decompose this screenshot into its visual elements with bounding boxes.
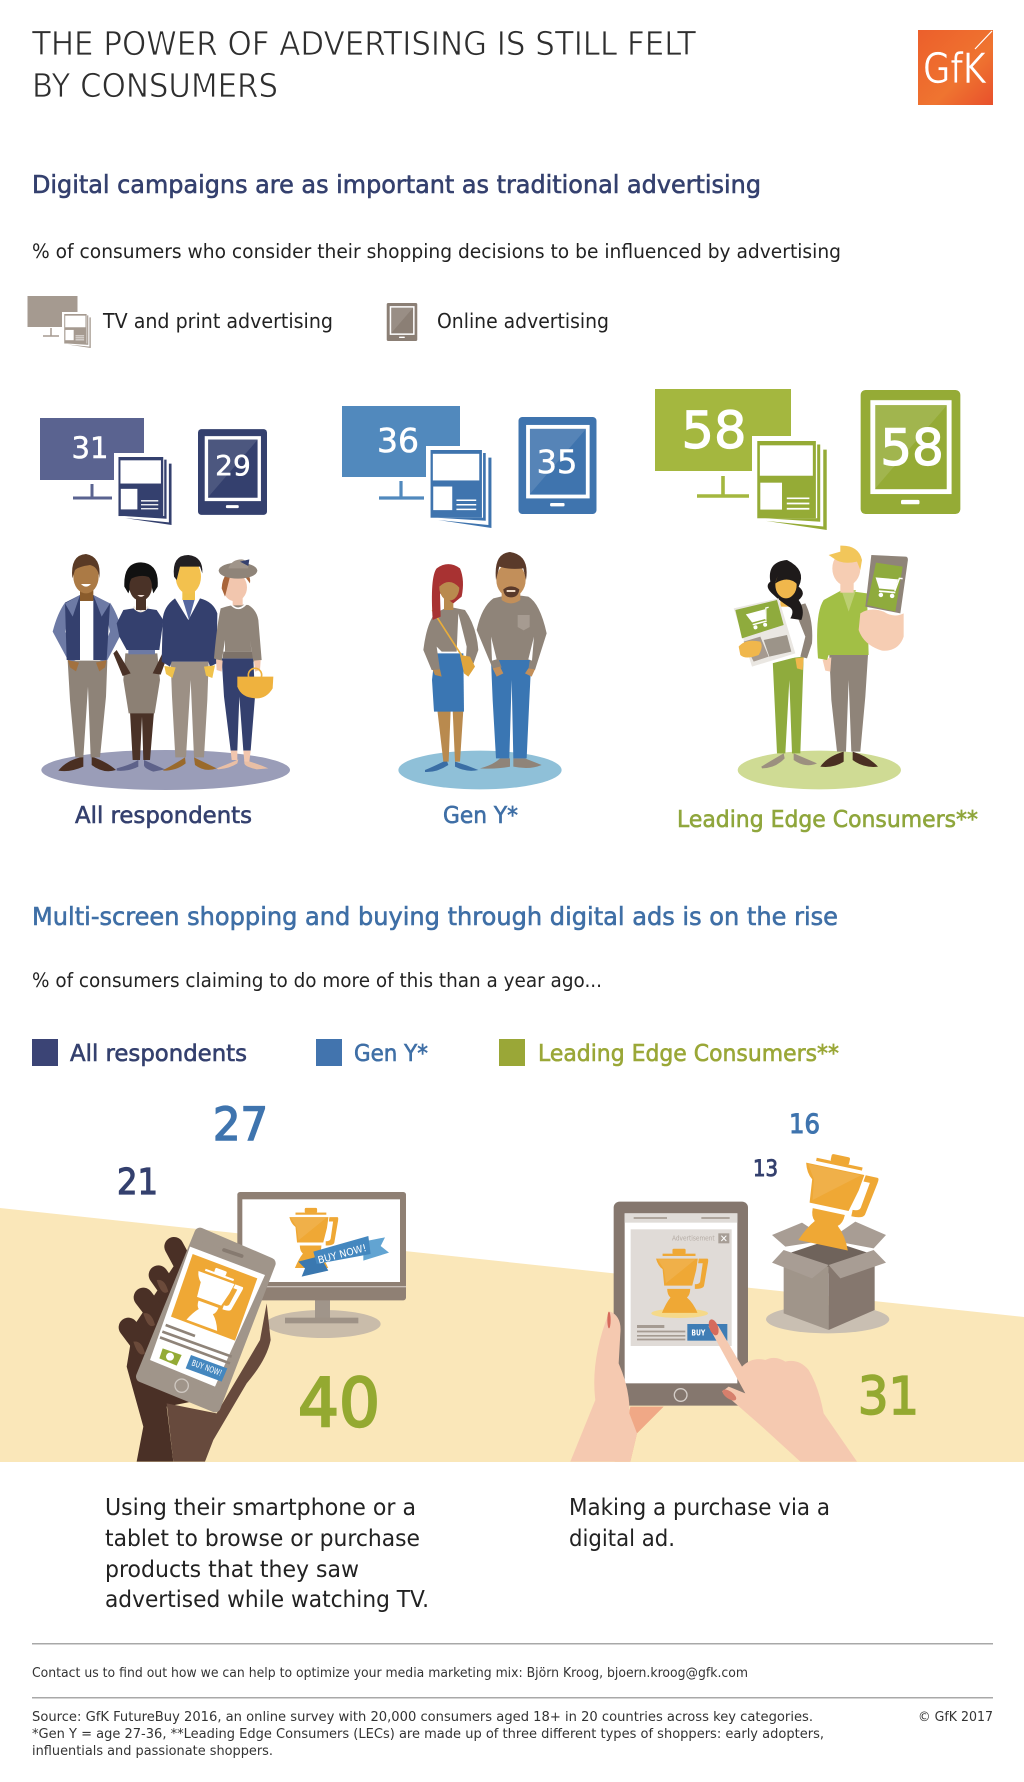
icon: TV 58 <box>655 389 830 532</box>
legend: respondent groups: Leading Edge Consumers** <box>538 1041 839 1067</box>
number: 13: 13 <box>753 1157 778 1182</box>
heading: multi-screen: Multi-screen shopping and buying through digital ads is on the rise <box>32 902 838 931</box>
subtitle: consumers influenced: % of consumers who consider their shopping decisions to be influenced by advertising <box>32 240 841 263</box>
description: smartphone or tablet: tablet to browse or purchase <box>105 1526 420 1552</box>
label: gen y: Gen Y* <box>443 803 518 829</box>
number: 40: 40 <box>298 1364 380 1442</box>
copyright: © GfK 2017 <box>918 1710 993 1725</box>
phone: BUY NOW! <box>190 1358 223 1378</box>
icon: TV 36: 36 <box>377 421 419 460</box>
icon: tablet 58: 58 <box>880 419 944 477</box>
box with blender <box>766 1149 889 1333</box>
contact line: Contact us to find out how we can help to optimize your media marketing mix: Björn Kroog, bjoern.kroog@gfk.com <box>32 1666 748 1681</box>
icon: tablet 58 <box>861 390 960 514</box>
legend: online: Online advertising <box>437 309 609 333</box>
tablet: Advertisement <box>672 1235 715 1243</box>
icon: TV 31: 31 <box>72 431 108 465</box>
legend: respondent groups: Gen Y* <box>354 1041 428 1067</box>
label: leading edge consumers: Leading Edge Consumers** <box>677 807 978 833</box>
icon: TV 36 <box>342 406 496 530</box>
description: purchase via ad <box>569 1495 830 1552</box>
icon: tablet 35: 35 <box>537 443 577 481</box>
description: smartphone or tablet: Using their smartphone or a <box>105 1495 416 1521</box>
icon: tablet 29: 29 <box>215 449 251 482</box>
illustration: monitor and phone in hand <box>127 1192 406 1462</box>
tablet <box>614 1202 748 1406</box>
phone <box>142 1233 270 1407</box>
legend: respondent groups <box>32 1039 839 1067</box>
hand <box>127 1247 271 1462</box>
subtitle: claiming to do more: % of consumers claiming to do more of this than a year ago... <box>32 969 602 992</box>
people: four respondents <box>41 554 290 790</box>
background: beige band <box>0 1208 1024 1462</box>
icon: TV 31 <box>40 418 176 527</box>
number: 27: 27 <box>213 1098 268 1151</box>
logo: GfK: GfK <box>923 44 987 93</box>
monitor: BUY NOW! <box>317 1243 368 1267</box>
legend: TV and print <box>28 296 333 348</box>
panel: all respondents <box>40 418 290 829</box>
description: smartphone or tablet: products that they saw <box>105 1557 359 1583</box>
panel: gen y <box>342 406 596 829</box>
number: 31: 31 <box>858 1367 919 1427</box>
logo: GfK <box>918 30 993 105</box>
description: smartphone or tablet <box>105 1495 429 1613</box>
description: purchase via ad: digital ad. <box>569 1526 675 1552</box>
panel: smartphone while watching TV <box>105 1098 429 1613</box>
legend: respondent groups: All respondents <box>70 1041 247 1067</box>
source notes <box>32 1710 824 1759</box>
number: 16: 16 <box>789 1109 820 1140</box>
people: leading edge couple <box>734 546 908 789</box>
icon: TV 58: 58 <box>682 402 746 461</box>
title <box>31 24 697 105</box>
description: purchase via ad: Making a purchase via a <box>569 1495 830 1521</box>
source notes: influentials and passionate shoppers. <box>32 1744 273 1759</box>
legend: online <box>387 303 609 341</box>
description: smartphone or tablet: advertised while watching TV. <box>105 1587 429 1613</box>
monitor <box>237 1192 406 1338</box>
panel: leading edge consumers <box>655 389 978 833</box>
hands <box>570 1312 857 1462</box>
source notes: Source: GfK FutureBuy 2016, an online survey with 20,000 consumers aged 18+ in 20 countries across key categories. <box>32 1710 813 1725</box>
legend: TV and print: TV and print advertising <box>102 309 333 333</box>
title: BY CONSUMERS <box>32 66 278 105</box>
icon: tablet 35 <box>519 417 596 514</box>
tablet: BUY <box>691 1328 705 1337</box>
people: gen y couple <box>398 552 562 789</box>
illustration: tablet, box and hands <box>570 1149 889 1462</box>
panel: purchase via digital ad <box>569 1109 919 1552</box>
source notes: *Gen Y = age 27-36, **Leading Edge Consumers (LECs) are made up of three different types of shoppers: early adopters, <box>32 1727 824 1742</box>
label: all respondents: All respondents <box>75 803 252 829</box>
number: 21: 21 <box>117 1162 158 1203</box>
icon: tablet 29 <box>198 429 267 515</box>
heading: digital campaigns: Digital campaigns are as important as traditional advertising <box>32 170 761 199</box>
title: THE POWER OF ADVERTISING IS STILL FELT <box>31 24 697 63</box>
